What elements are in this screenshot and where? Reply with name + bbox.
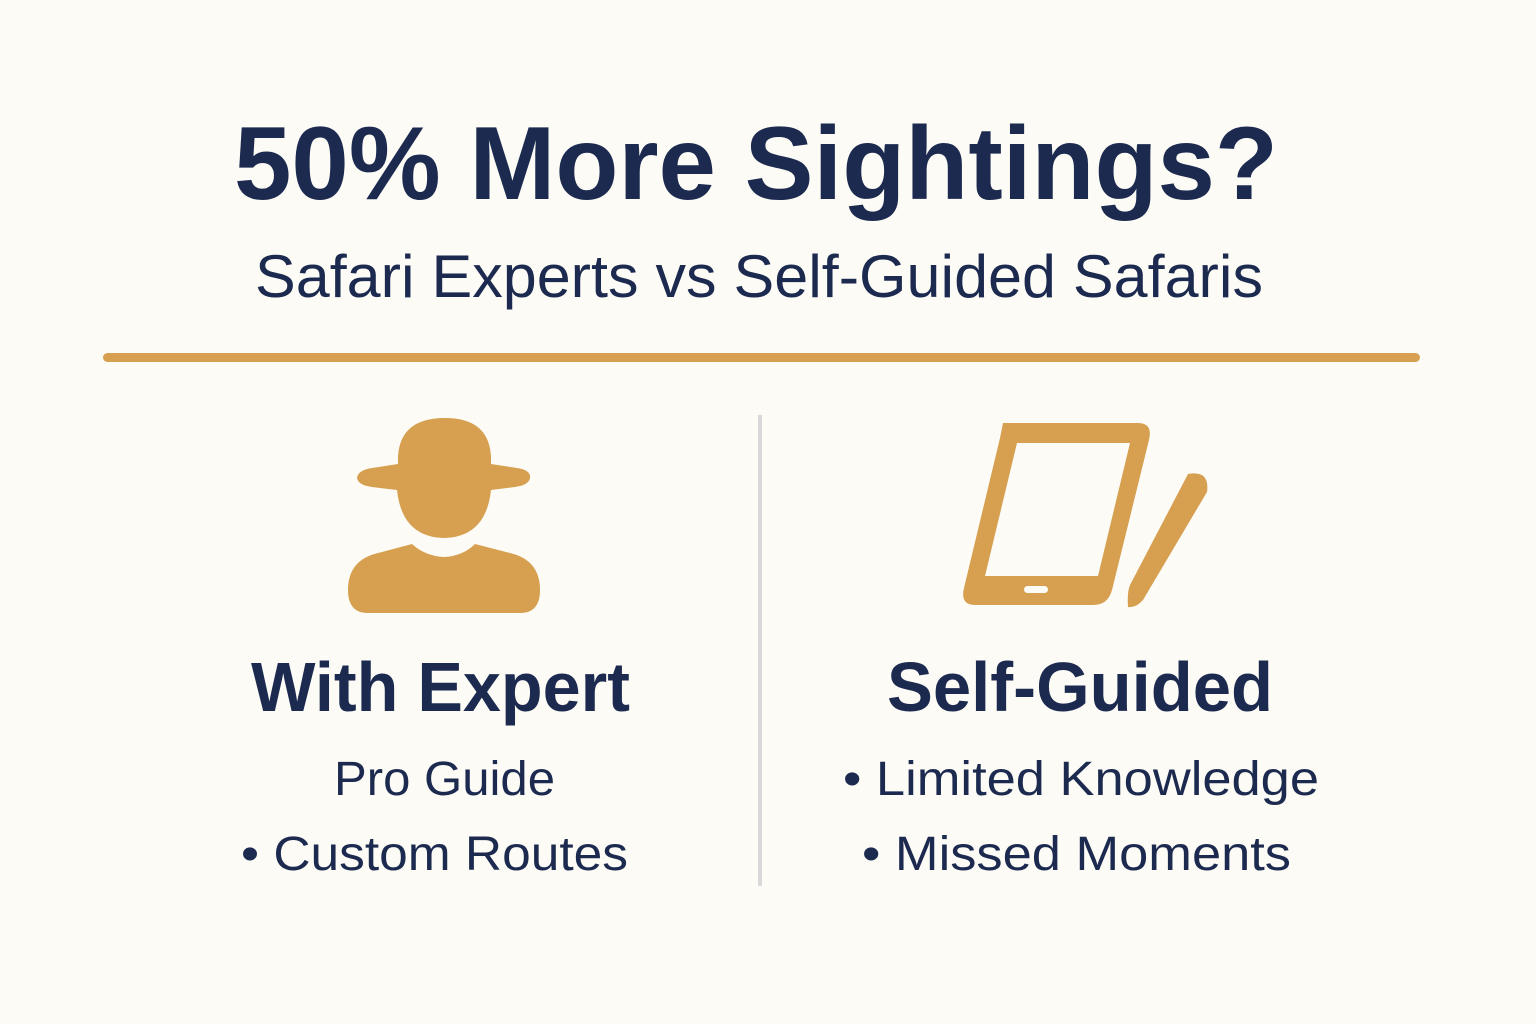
icon: tablet and pen — [963, 423, 1207, 607]
heading: With Expert: With Expert — [251, 648, 630, 726]
icon: guide with hat — [348, 418, 540, 613]
subtitle: Safari Experts vs Self-Guided Safaris — [255, 243, 1263, 310]
heading: Self-Guided: Self-Guided — [887, 648, 1273, 726]
title: 50% More Sightings? — [234, 106, 1278, 222]
text: Missed Moments: • Missed Moments — [862, 828, 1291, 881]
panel: self-guided — [843, 423, 1319, 881]
text: Limited Knowledge: • Limited Knowledge — [843, 753, 1319, 806]
panel: with expert — [241, 418, 630, 881]
text: Custom Routes: • Custom Routes — [241, 828, 628, 881]
text: Pro Guide: Pro Guide — [334, 753, 555, 806]
